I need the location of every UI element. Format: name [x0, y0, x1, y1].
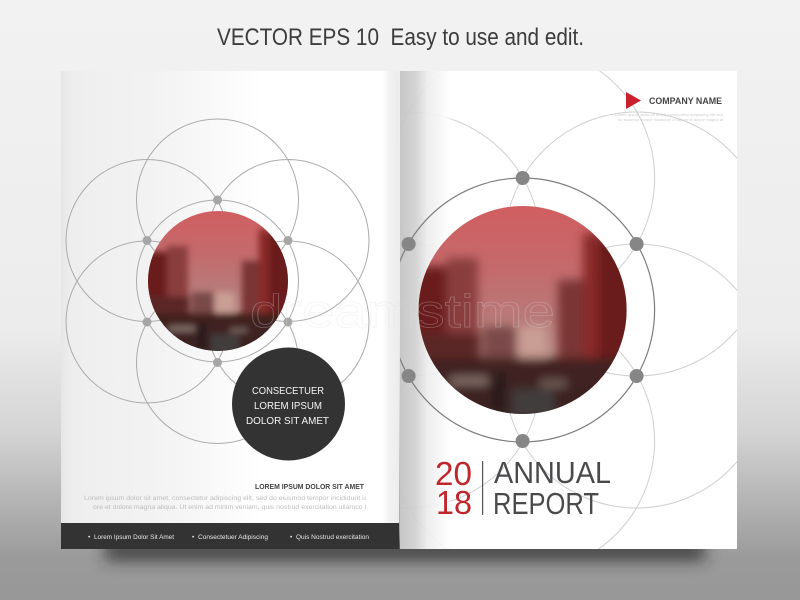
main ring	[391, 178, 655, 442]
dark callout circle	[232, 348, 345, 460]
dark callout circle: CONSECETUER	[252, 386, 324, 397]
dark callout circle: LOREM IPSUM	[254, 401, 322, 412]
right node dots	[402, 171, 644, 448]
left page text block: ore et dolore magna aliqua. Ut enim ad minim veniam, quis nostrud exercitation ullamco l	[93, 504, 367, 511]
company tagline: Lorem ipsum dolor sit amet, consectetur adipiscing elit sed	[615, 112, 723, 117]
panel: left brochure page	[61, 71, 399, 549]
dark callout circle: DOLOR SIT AMET	[246, 416, 329, 427]
left node dots	[142, 196, 292, 367]
footer bar: •	[88, 534, 91, 541]
panel: right brochure page	[400, 71, 737, 549]
book shadow	[105, 541, 705, 560]
heading: annual report: REPORT	[493, 486, 599, 521]
logo: red triangle	[626, 92, 641, 109]
footer bar: •	[192, 534, 195, 541]
spine shading	[400, 71, 455, 549]
left circle pattern	[66, 119, 369, 444]
left page text block	[84, 482, 367, 511]
heading divider	[482, 461, 483, 515]
left photo circle	[130, 211, 306, 376]
company tagline	[615, 112, 723, 122]
right photo circle	[393, 206, 654, 451]
footer bar: Quis Nostrud exercitation	[296, 534, 369, 541]
heading: annual report: ANNUAL	[494, 455, 611, 490]
footer bar	[61, 523, 399, 549]
title: VECTOR EPS 10 Easy to use and edit.	[217, 24, 584, 51]
footer bar: Lorem Ipsum Dolor Sit Amet	[94, 534, 174, 541]
footer bar: Consectetuer Adipiscing	[198, 534, 268, 541]
footer bar: •	[290, 534, 293, 541]
year 2018: 18	[436, 484, 472, 521]
heading: annual report	[493, 455, 611, 521]
year 2018: 20	[435, 455, 472, 492]
watermark: dreamstime	[250, 285, 555, 337]
company tagline: do eiusmod tempor incididunt ut labore et dolore magna al	[618, 117, 723, 122]
company name: COMPANY NAME	[649, 96, 722, 106]
right circle pattern	[445, 71, 737, 549]
year 2018	[435, 455, 472, 521]
left page text block: LOREM IPSUM DOLOR SIT AMET	[255, 482, 364, 491]
left page text block: Lorem ipsum dolor sit amet, consectetur adipiscing elit, sed do eiusmod tempor incididunt u	[84, 495, 366, 502]
